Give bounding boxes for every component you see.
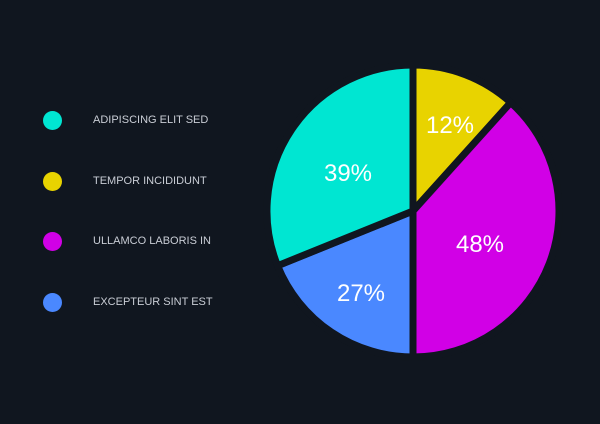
label 39%: 39% [324, 160, 372, 187]
legend item: excepteur [43, 293, 213, 312]
label 12%: 12% [426, 112, 474, 139]
legend item: ullamco [43, 232, 211, 251]
legend item: excepteur: EXCEPTEUR SINT EST [93, 296, 213, 308]
label 48%: 48% [456, 231, 504, 258]
legend item: adipiscing: ADIPISCING ELIT SED [93, 114, 208, 126]
legend item: ullamco: ULLAMCO LABORIS IN [93, 235, 211, 247]
legend item: tempor [43, 172, 207, 191]
slice: 39% cyan [267, 65, 413, 266]
legend [43, 111, 213, 312]
slice: 27% blue [278, 211, 413, 357]
legend item: tempor: TEMPOR INCIDIDUNT [93, 175, 207, 187]
slice: 12% yellow [413, 65, 511, 211]
slice: 48% magenta [413, 102, 559, 357]
label 27%: 27% [337, 280, 385, 307]
legend item: adipiscing [43, 111, 208, 130]
